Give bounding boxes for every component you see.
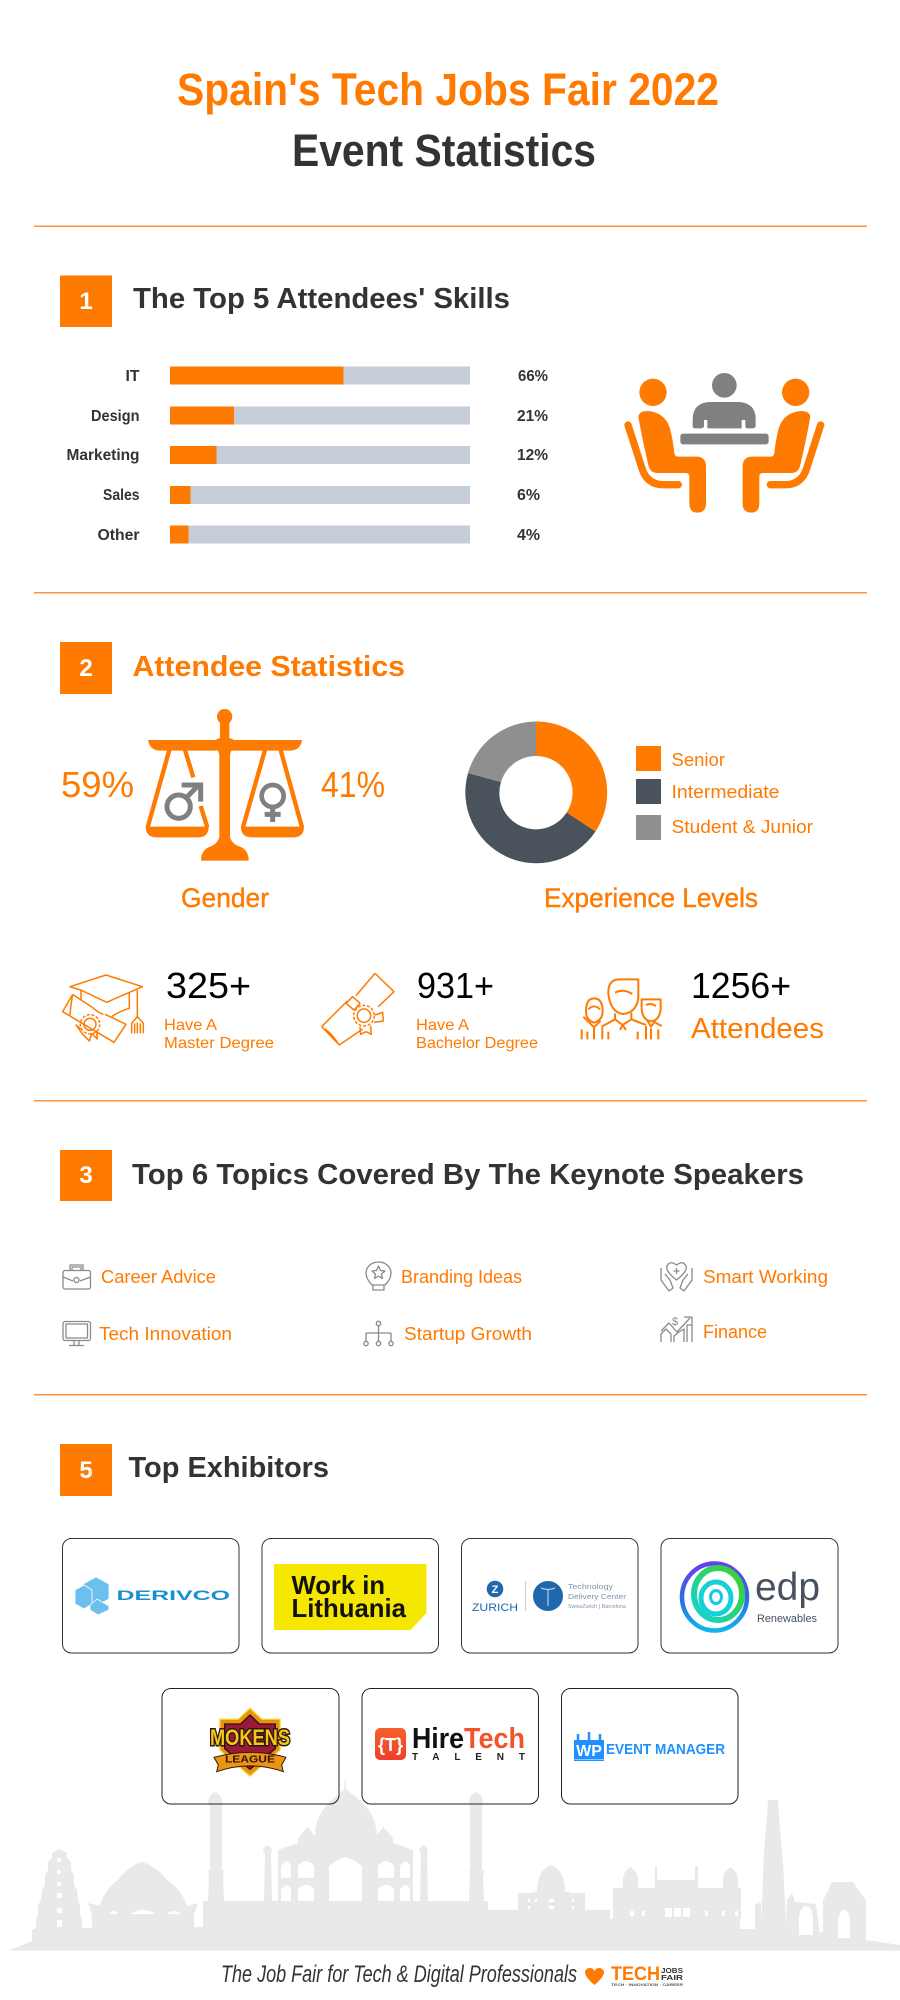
card: derivco (62, 1538, 239, 1653)
legend: experience levels (636, 746, 813, 840)
icon: attendees (582, 979, 662, 1039)
card: zurich: SwissZurich | Barcelona (568, 1604, 627, 1610)
card: zurich: ZURICH (472, 1602, 518, 1614)
bar chart: skills: 4% (517, 527, 540, 544)
logo: tech jobs fair: FAIR (661, 1975, 683, 1982)
legend: experience levels: Senior (672, 750, 725, 770)
topic labels: Tech Innovation (99, 1324, 232, 1344)
footer tagline: The Job Fair for Tech & Digital Professionals (221, 1961, 577, 1988)
section badge 2: 2 (79, 655, 93, 682)
section badge 3: 3 (79, 1162, 93, 1189)
icon: gender scale (146, 709, 304, 861)
stat: master degree (164, 965, 274, 1052)
logo: tech jobs fair: JOBS (661, 1968, 683, 1975)
panel: attendee statistics (60, 642, 824, 1052)
icon: light bulb (366, 1262, 391, 1290)
title: Event Statistics (292, 125, 596, 176)
card: mokens league: LEAGUE (225, 1755, 275, 1766)
card: hiretech talent: {T} (378, 1735, 403, 1755)
card: mokens league (162, 1688, 339, 1804)
icon: diploma (322, 973, 394, 1045)
title: Spain's Tech Jobs Fair 2022 (177, 64, 719, 115)
icon: meeting table (628, 373, 821, 513)
icon: briefcase (63, 1265, 90, 1289)
stat: master degree: Master Degree (164, 1035, 274, 1052)
stat: bachelor degree: Have A (416, 1017, 469, 1034)
bar chart: skills: 12% (517, 447, 548, 464)
icon: caring hands (661, 1263, 692, 1291)
topic labels: Smart Working (703, 1267, 828, 1287)
heading: skills: The Top 5 Attendees' Skills (133, 283, 510, 315)
bar chart: skills: 6% (517, 487, 540, 504)
label: gender: Gender (181, 883, 269, 913)
gender percentages (61, 764, 385, 805)
topic labels (99, 1267, 828, 1344)
card: hiretech talent: Hire (412, 1723, 464, 1755)
card: zurich: Technology (568, 1582, 613, 1591)
section badge 3 (60, 1150, 112, 1201)
card: wp event manager: WP (576, 1743, 602, 1760)
card: work in lithuania (262, 1538, 438, 1653)
topic labels: Finance (703, 1322, 767, 1342)
stat: master degree: Have A (164, 1017, 217, 1034)
legend: experience levels: Intermediate (672, 782, 780, 802)
icon: heart (585, 1968, 604, 1985)
bar chart: skills: Design (91, 408, 140, 425)
topic labels: Startup Growth (404, 1324, 532, 1344)
section badge 5: 5 (79, 1457, 93, 1484)
section badge 5 (60, 1444, 112, 1496)
card: zurich: Delivery Center (568, 1592, 627, 1601)
stat: total attendees: Attendees (691, 1013, 824, 1045)
card: hiretech talent: TALENT (412, 1752, 525, 1763)
section badge 1 (60, 276, 112, 327)
gender percentages: 41% (321, 764, 385, 805)
stat: bachelor degree: Bachelor Degree (416, 1035, 538, 1052)
icon: org chart (364, 1321, 393, 1346)
heading: topics: Top 6 Topics Covered By The Keynote Speakers (132, 1159, 804, 1191)
card: zurich: Z (492, 1584, 499, 1596)
title (177, 64, 719, 176)
topic labels: Career Advice (101, 1267, 216, 1287)
bar chart: skills: Sales (103, 487, 140, 504)
logo: tech jobs fair (611, 1964, 684, 1987)
card: work in lithuania: Work in (292, 1570, 385, 1600)
card: zurich (462, 1538, 638, 1653)
heading: attendee statistics: Attendee Statistics (132, 651, 405, 683)
donut chart: experience levels (465, 721, 607, 863)
stat: bachelor degree: 931+ (417, 965, 494, 1006)
card: edp renewables (661, 1538, 838, 1653)
icon: finance chart: $ (672, 1316, 678, 1328)
card: wp event manager: EVENT MANAGER (606, 1741, 725, 1758)
heading: exhibitors: Top Exhibitors (128, 1452, 329, 1484)
bar chart: skills (66, 366, 548, 544)
logo: tech jobs fair: TECH · INNOVATION · CAREER (611, 1983, 684, 1987)
panel: top skills (60, 276, 821, 544)
bar chart: skills: 21% (517, 408, 548, 425)
card: wp event manager (562, 1688, 738, 1804)
topic labels: Branding Ideas (401, 1267, 522, 1287)
section badge 2 (60, 642, 112, 694)
card: edp renewables: Renewables (757, 1613, 817, 1625)
bar chart: skills: Other (98, 527, 140, 544)
stat: bachelor degree (416, 965, 538, 1052)
bar chart: skills: 66% (518, 368, 548, 385)
label: experience levels: Experience Levels (544, 883, 758, 913)
icon: graduation cap (63, 975, 143, 1042)
legend: experience levels: Student & Junior (672, 817, 813, 837)
card: derivco: DERIVCO (116, 1587, 230, 1603)
skyline window cut-outs (57, 1857, 850, 1938)
stat: total attendees (691, 965, 824, 1045)
panel: top exhibitors (60, 1444, 838, 1804)
logo: tech jobs fair: TECH (611, 1964, 660, 1985)
skyline illustration (9, 1777, 900, 1950)
card: hiretech talent: Tech (464, 1723, 525, 1755)
card: work in lithuania: Lithuania (292, 1593, 407, 1623)
gender percentages: 59% (61, 764, 134, 805)
bar chart: skills: Marketing (66, 447, 140, 464)
icon: monitor (63, 1322, 90, 1346)
card: hiretech talent (362, 1688, 538, 1804)
card: mokens league: MOKENS (210, 1725, 290, 1750)
section badge 1: 1 (79, 288, 93, 315)
bar chart: skills: IT (126, 368, 140, 385)
stat: master degree: 325+ (166, 965, 251, 1006)
icon: finance chart (661, 1316, 692, 1342)
stat: total attendees: 1256+ (691, 965, 791, 1006)
card: edp renewables: edp (755, 1566, 820, 1609)
panel: keynote topics (60, 1150, 828, 1346)
